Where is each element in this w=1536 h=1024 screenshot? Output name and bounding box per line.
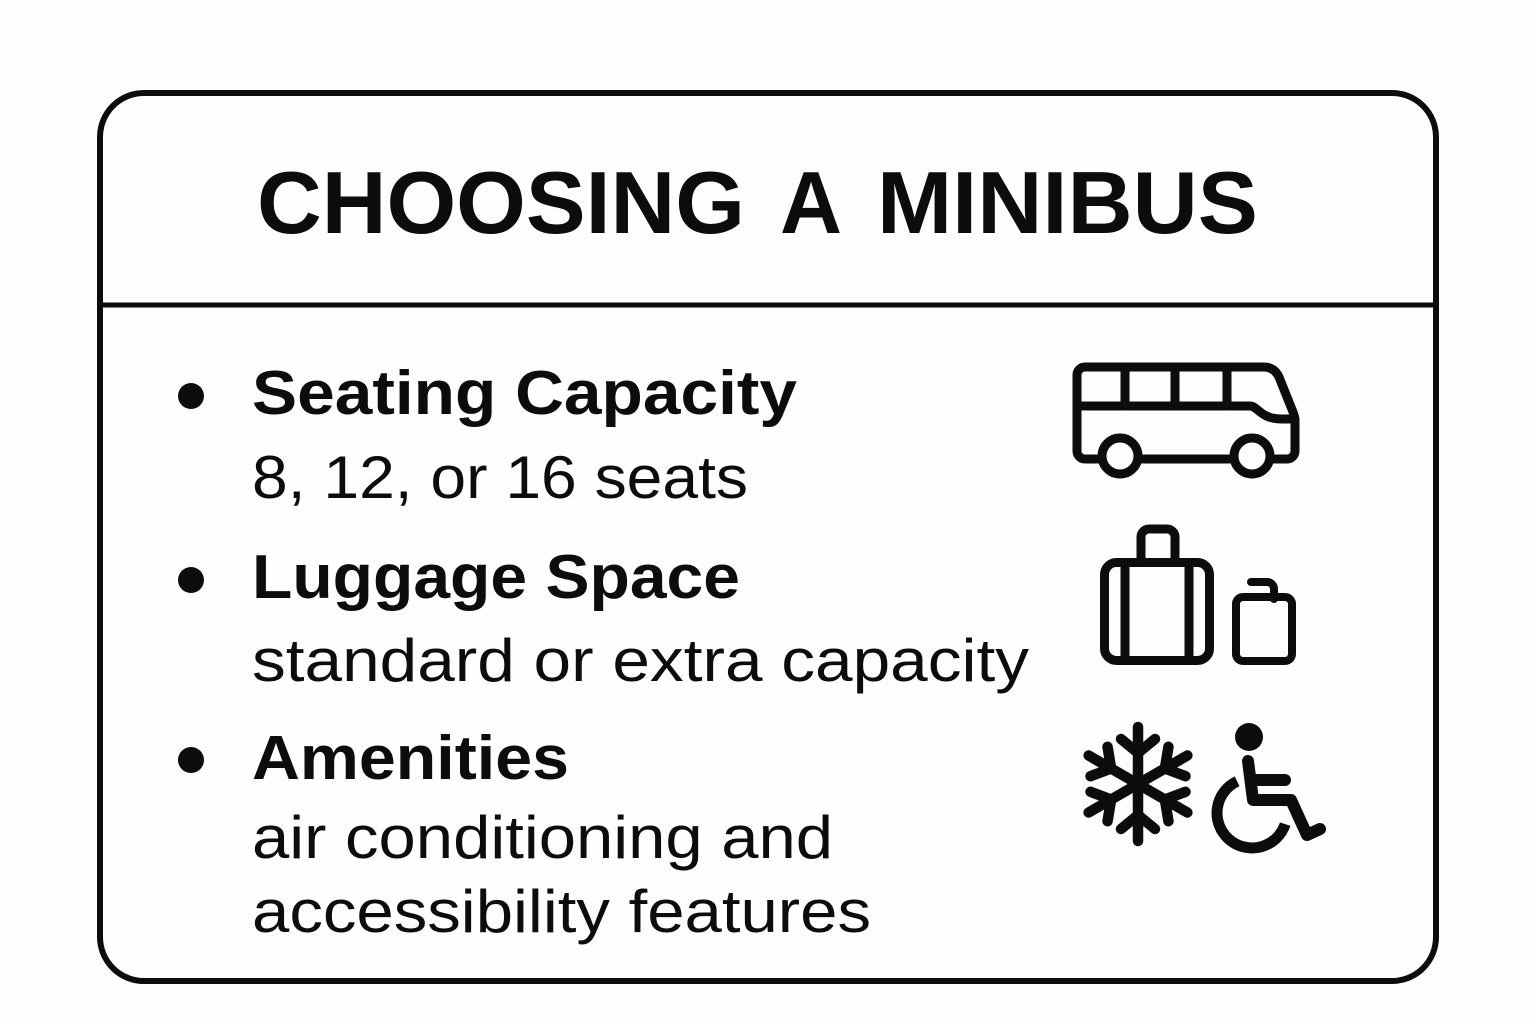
panel: choosing a minibus card: [100, 93, 1436, 981]
title: [257, 153, 1258, 252]
heading: luggage space: Luggage Space: [252, 543, 740, 612]
heading: amenities: Amenities: [252, 724, 569, 793]
text: amenities details: air conditioning and: [252, 804, 833, 871]
bullet: [178, 747, 204, 773]
item: luggage space: [178, 543, 1029, 694]
text: luggage options: standard or extra capacity: [252, 627, 1029, 694]
text: amenities details second line: accessibility features: [252, 878, 871, 945]
icon: snowflake: [1080, 727, 1196, 841]
icon: luggage: [1104, 529, 1292, 661]
item: amenities: [178, 724, 871, 945]
icon: minibus: [1077, 367, 1295, 474]
title: MINIBUS: [877, 153, 1258, 252]
icon: wheelchair accessibility: [1217, 723, 1320, 848]
title: A: [780, 153, 842, 252]
bullet: [178, 567, 204, 593]
heading: seating capacity: Seating Capacity: [252, 359, 798, 428]
item: seating capacity: [178, 359, 798, 511]
bullet: [178, 383, 204, 409]
title: CHOOSING: [257, 153, 745, 252]
text: seat options: 8, 12, or 16 seats: [252, 444, 748, 511]
